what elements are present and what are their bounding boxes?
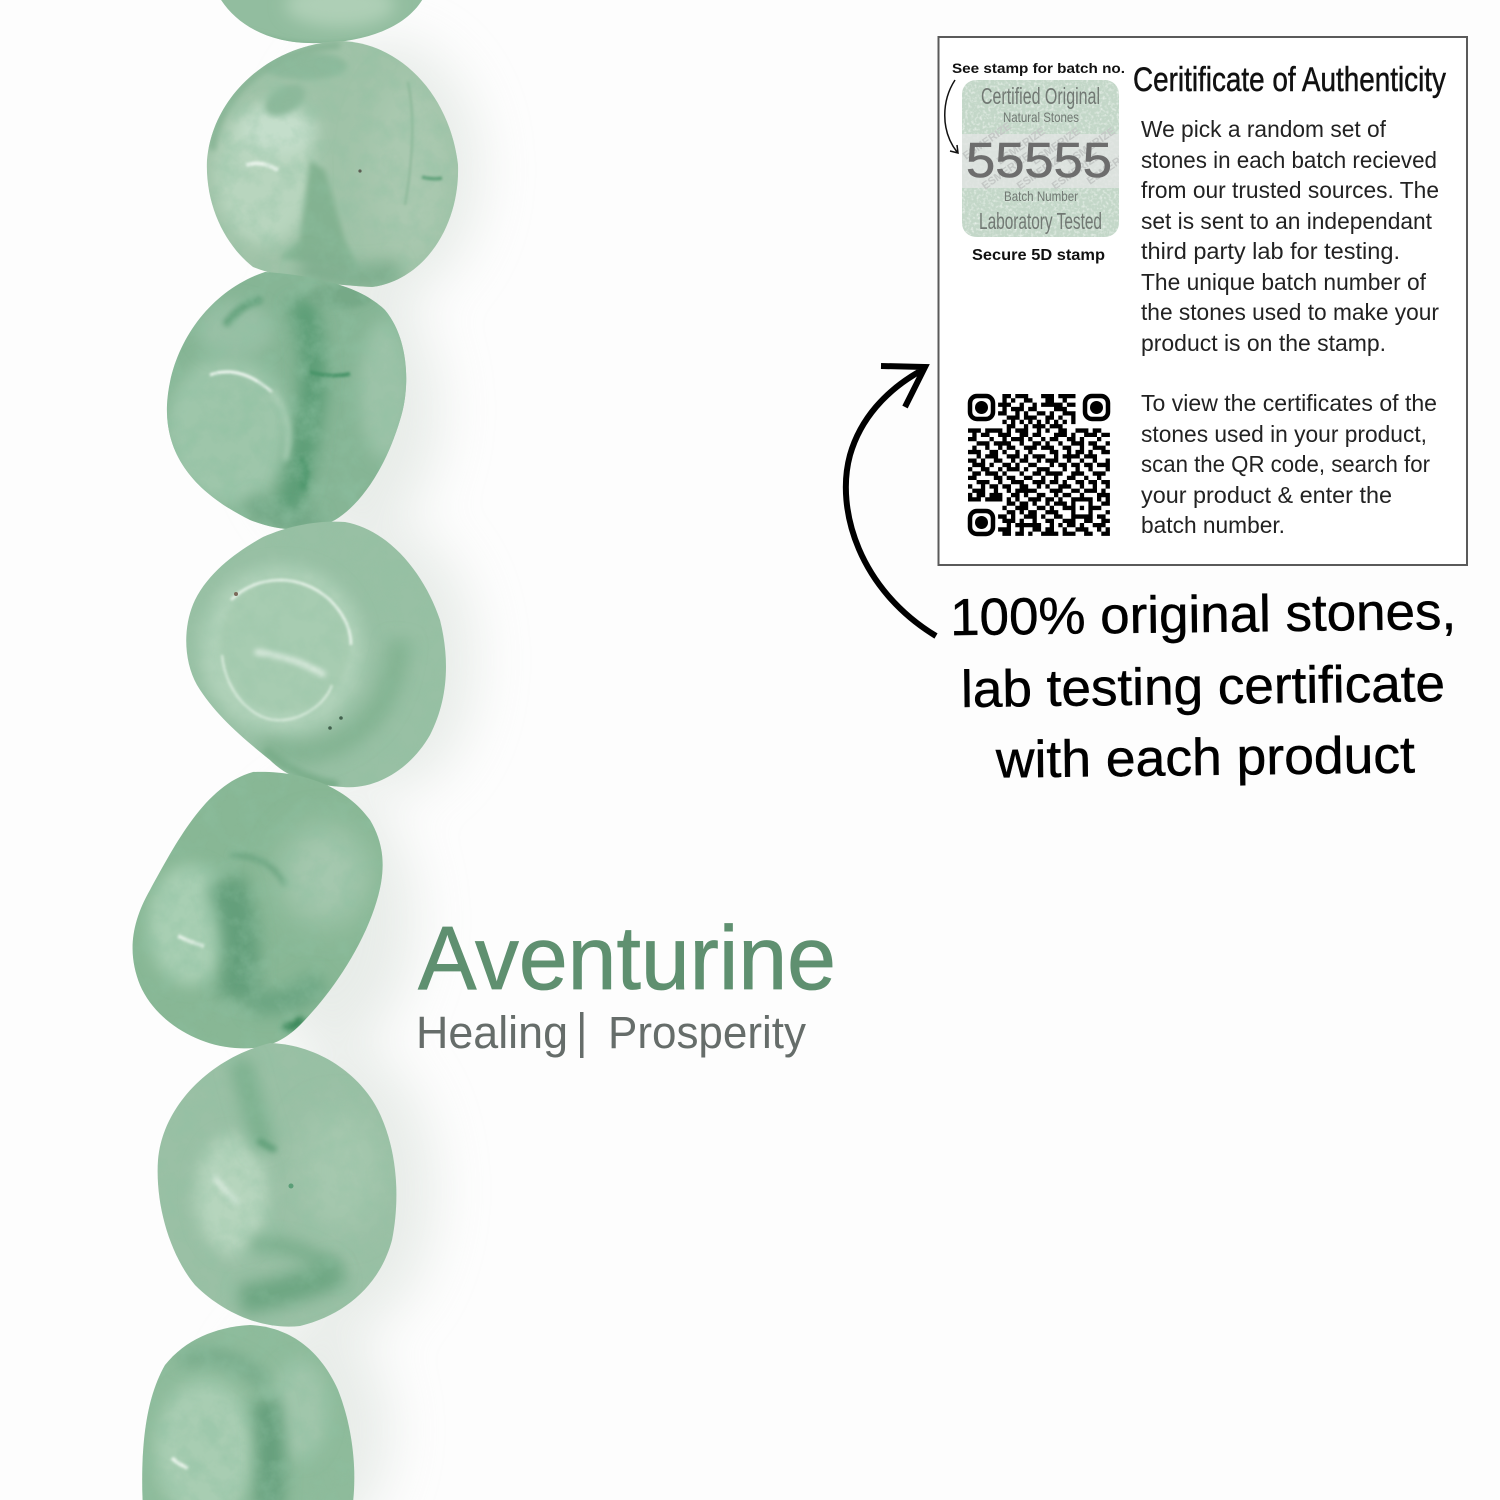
security stamp: Certified Original [981,83,1100,109]
certificate card [938,37,1467,565]
callout text: 100% original stones, [950,583,1456,647]
security stamp: ESMERIZE [980,150,1033,192]
security stamp: 55555 [966,134,1112,188]
tagline: Healing | Prosperity: Healing [416,1007,568,1058]
tagline: Healing | Prosperity: Prosperity [608,1007,806,1058]
security stamp: ESMERIZE [1030,125,1083,167]
certificate description: product is on the stamp. [1141,330,1386,356]
QR instructions: batch number. [1141,512,1285,538]
security stamp: ESMERIZE [1015,150,1068,192]
product name: Aventurine: Aventurine [418,909,836,1009]
stamp caption bottom: Secure 5D stamp [972,247,1105,264]
security stamp [962,80,1119,237]
QR instructions: scan the QR code, search for [1141,451,1430,477]
stone 5 [125,765,390,1055]
certificate description: We pick a random set of [1141,116,1387,142]
security stamp: ESMERIZE [961,120,1014,162]
certificate description: the stones used to make your [1141,299,1439,325]
stone 6 [158,1043,396,1327]
QR instructions: stones used in your product, [1141,421,1427,447]
stone shadows [230,40,480,1500]
certificate description: from our trusted sources. The [1141,177,1439,203]
security stamp: ESMERIZE [1085,145,1138,187]
stamp caption top: See stamp for batch no. [952,60,1125,76]
stone 3 [166,272,406,529]
callout text: with each product [995,726,1416,790]
QR code [968,396,1110,534]
security stamp: Laboratory Tested [979,208,1102,234]
QR instructions: To view the certificates of the [1141,390,1437,416]
security stamp: ESMERIZE [995,125,1048,167]
callout text [950,583,1458,790]
small arrow to stamp [945,80,958,153]
certificate description: stones in each batch recieved [1141,147,1437,173]
curved arrow to certificate [846,366,936,636]
stone 7 [135,1320,360,1500]
callout text: lab testing certificate [961,655,1445,719]
certificate description: The unique batch number of [1141,269,1427,295]
security stamp: Batch Number [1004,188,1078,204]
certificate description: third party lab for testing. [1141,238,1400,264]
security stamp: ESMERIZE [1065,125,1118,167]
stone 4 [186,522,446,788]
QR instructions [1141,390,1437,538]
tagline: Healing | Prosperity [416,1007,806,1058]
security stamp: Natural Stones [1003,109,1079,125]
stone 2 [206,41,458,287]
QR instructions: your product & enter the [1141,482,1392,508]
security stamp: ESMERIZE [1050,150,1103,192]
certificate description: set is sent to an independant [1141,208,1433,234]
certificate description [1141,116,1439,356]
stone 1 [221,0,422,44]
